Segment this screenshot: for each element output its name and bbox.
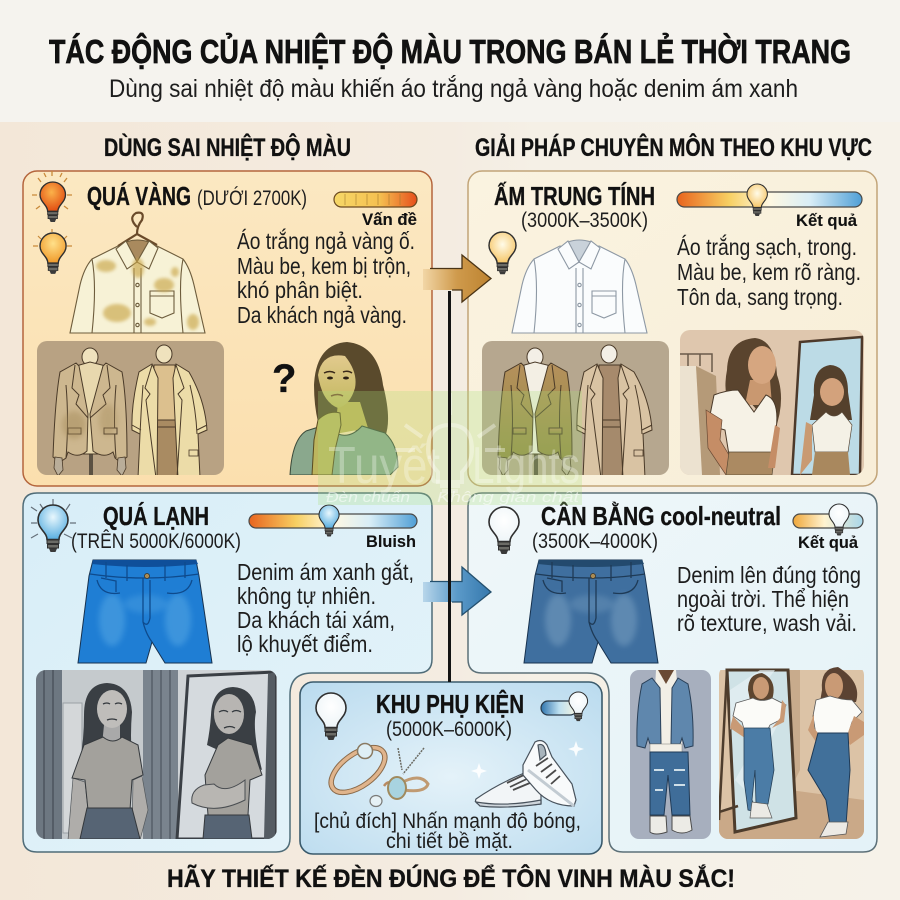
- text: problem description: Màu be, kem bị trộn,: [237, 253, 411, 279]
- illustration: clean jackets on mannequins: [482, 341, 669, 478]
- text: problem description: khó phân biệt.: [237, 277, 363, 303]
- text: result description: Tôn da, sang trọng.: [677, 284, 843, 310]
- panel: accessories zone: [300, 682, 602, 854]
- temperature bar: [334, 192, 417, 207]
- illustration: gold ring: [324, 739, 392, 801]
- icon: question mark: ?: [272, 357, 296, 401]
- illustration: yellowed shirt: [70, 240, 205, 333]
- icon: slider bulb: [319, 505, 339, 536]
- heading: wrong colour temperature: DÙNG SAI NHIỆT ĐỘ MÀU: [104, 132, 351, 162]
- panel: warm neutral: [468, 171, 877, 486]
- icon: slider bulb: [569, 692, 588, 721]
- illustration: unhappy woman at mirror: [36, 670, 277, 840]
- text: result description: rõ texture, wash vải.: [677, 610, 857, 636]
- watermark: Không gian chất: [437, 489, 580, 506]
- icon: slider bulb: [747, 184, 767, 216]
- text: result description: Màu be, kem rõ ràng.: [677, 259, 861, 285]
- text: result description: [677, 562, 861, 636]
- panel: too yellow: [23, 171, 432, 486]
- bar label: Vấn đề: [362, 211, 417, 229]
- watermark: Tuyết: [328, 437, 440, 495]
- panel: cool neutral balance: [468, 493, 877, 852]
- illustration: over-blue jeans: [78, 560, 212, 663]
- panel heading: QUÁ LẠNH: [103, 501, 209, 531]
- text: result description: [677, 234, 861, 310]
- bar label: Kết quả: [796, 212, 858, 230]
- kelvin range: (5000K–6000K): [386, 718, 512, 741]
- icon: amber bulb: [33, 229, 72, 274]
- icon: warm bulb: [489, 232, 516, 274]
- arrow: yellow to warm neutral: [423, 255, 491, 302]
- temperature bar: [677, 192, 862, 207]
- connector line: [448, 291, 451, 682]
- text: problem description: lộ khuyết điểm.: [237, 631, 373, 657]
- icon: orange bulb: [32, 171, 72, 222]
- subtitle: Dùng sai nhiệt độ màu khiến áo trắng ngả vàng hoặc denim ám xanh: [109, 74, 798, 103]
- illustration: happy woman at mirror: [680, 330, 864, 475]
- illustration: stained jackets on mannequins: [37, 341, 224, 478]
- icon: blue bulb: [31, 499, 76, 552]
- text: purpose line one: [chủ đích] Nhấn mạnh độ bóng,: [314, 809, 581, 833]
- illustration: small gem: [370, 796, 382, 806]
- temperature bar: [541, 701, 577, 715]
- panel: too cold: [23, 493, 432, 852]
- kelvin range: (3000K–3500K): [521, 209, 648, 232]
- icon: white bulb: [316, 693, 346, 740]
- icon: slider bulb: [829, 504, 849, 535]
- icon: white bulb: [489, 507, 519, 554]
- text: result description: ngoài trời. Thể hiện: [677, 586, 849, 612]
- bar label: Bluish: [366, 532, 416, 551]
- illustration: woman and reflection: [719, 667, 864, 839]
- illustration: white sneakers: [476, 741, 576, 807]
- text: problem description: Áo trắng ngả vàng ố.: [237, 228, 415, 254]
- text: problem description: [237, 228, 415, 328]
- watermark: [318, 391, 582, 506]
- panel heading: CÂN BẰNG cool-neutral: [541, 501, 781, 531]
- text: problem description: không tự nhiên.: [237, 583, 376, 609]
- illustration: true-tone jeans: [524, 560, 658, 663]
- panel heading: ẤM TRUNG TÍNH: [494, 181, 655, 211]
- kelvin range: (TRÊN 5000K/6000K): [71, 530, 241, 553]
- text: problem description: [237, 559, 414, 657]
- illustration: confused woman: [290, 342, 398, 475]
- text: problem description: Da khách ngả vàng.: [237, 302, 407, 328]
- icon: sparkles: [471, 741, 584, 779]
- text: result description: Áo trắng sạch, trong.: [677, 234, 857, 260]
- arrow: cold to balanced: [423, 567, 491, 615]
- text: problem description: Denim ám xanh gắt,: [237, 559, 414, 585]
- temperature bar: [249, 514, 417, 528]
- watermark: Đèn chuẩn: [326, 489, 410, 506]
- text: purpose line two: chi tiết bề mặt.: [386, 829, 513, 853]
- illustration: denim outfit: [630, 670, 711, 839]
- panel heading: QUÁ VÀNG: [87, 181, 191, 211]
- illustration: clean white shirt: [512, 240, 647, 333]
- icon: hanger: [118, 213, 157, 246]
- panel heading: KHU PHỤ KIỆN: [376, 689, 524, 719]
- kelvin range: (3500K–4000K): [532, 530, 658, 553]
- kelvin range: (DƯỚI 2700K): [197, 187, 307, 210]
- temperature bar: [793, 514, 863, 528]
- text: result description: Denim lên đúng tông: [677, 562, 861, 588]
- illustration: necklace: [384, 748, 428, 799]
- text: problem description: Da khách tái xám,: [237, 607, 395, 633]
- watermark: Lights: [472, 437, 580, 495]
- footer call to action: HÃY THIẾT KẾ ĐÈN ĐÚNG ĐỂ TÔN VINH MÀU SẮC!: [167, 863, 735, 893]
- bar label: Kết quả: [798, 533, 859, 552]
